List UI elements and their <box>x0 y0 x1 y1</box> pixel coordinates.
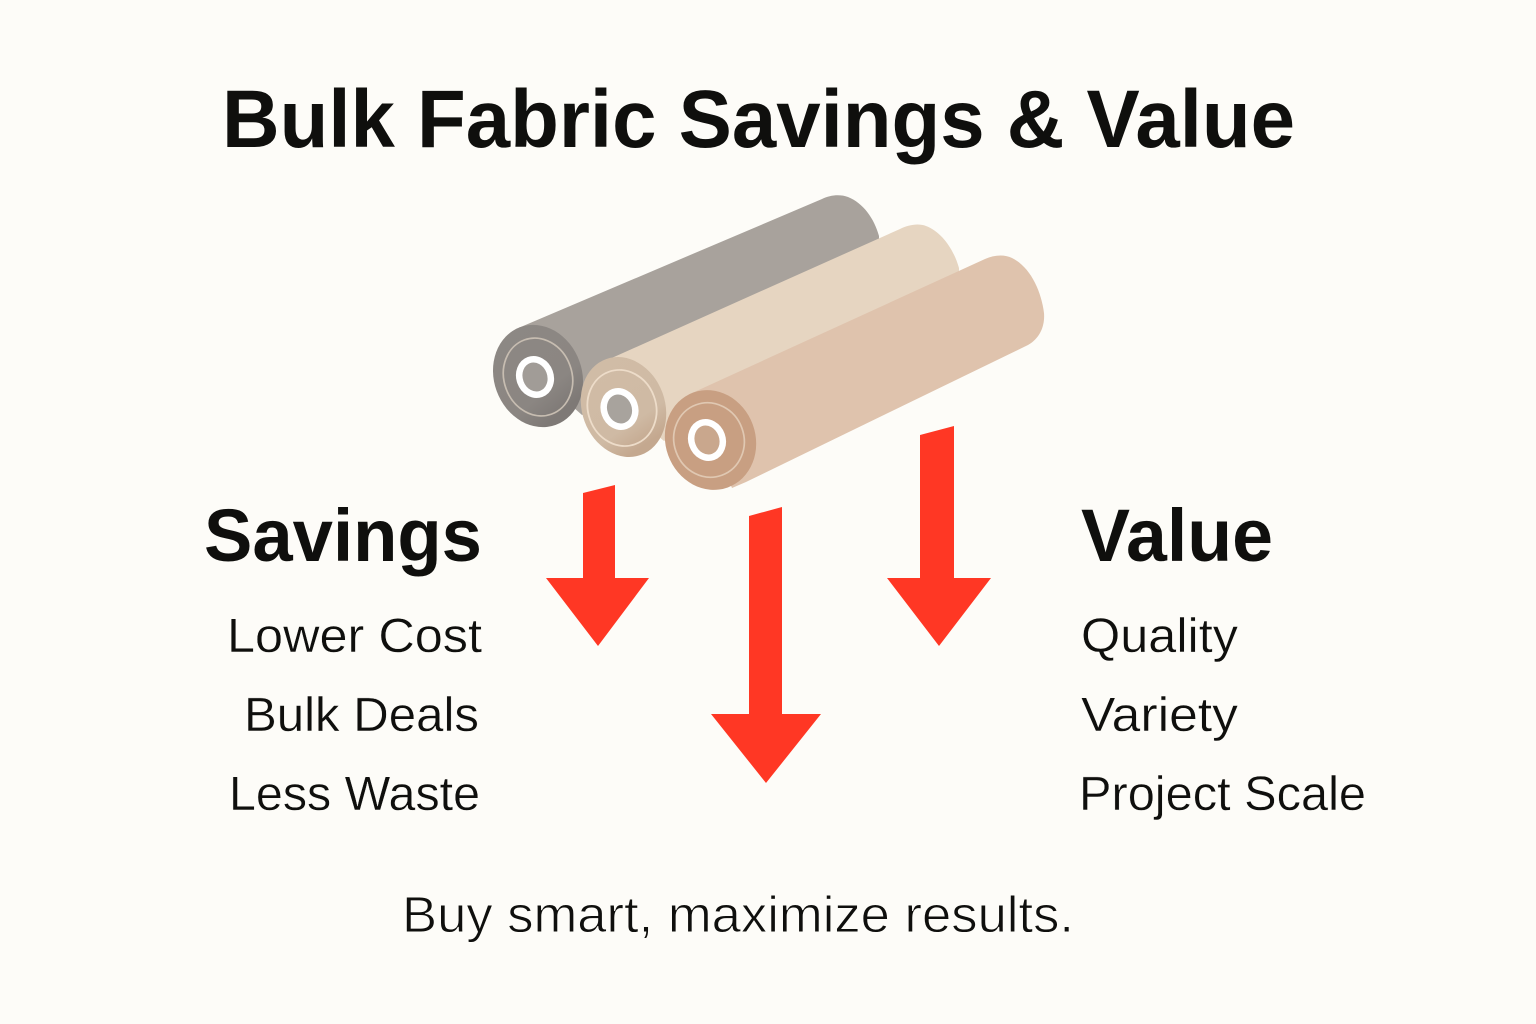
gray fabric roll <box>479 195 879 440</box>
arrow: center <box>711 507 821 783</box>
list item: less waste: Less Waste <box>229 768 480 821</box>
heading: savings: Savings <box>204 494 482 577</box>
arrow: right <box>887 426 991 646</box>
illustration: three fabric rolls <box>479 195 1044 503</box>
list item: bulk deals: Bulk Deals <box>244 689 479 742</box>
list item: lower cost: Lower Cost <box>227 610 482 663</box>
title: Bulk Fabric Savings & Value <box>222 74 1295 165</box>
panel: value <box>1079 494 1366 821</box>
arrow: left <box>546 485 649 646</box>
list item: quality: Quality <box>1081 610 1238 663</box>
list item: project scale: Project Scale <box>1079 768 1366 821</box>
panel: savings <box>204 494 482 821</box>
footer tagline: Buy smart, maximize results. <box>402 886 1074 943</box>
tan fabric roll <box>651 255 1044 503</box>
list item: variety: Variety <box>1081 689 1238 742</box>
heading: value: Value <box>1081 494 1273 577</box>
beige fabric roll <box>567 225 959 469</box>
